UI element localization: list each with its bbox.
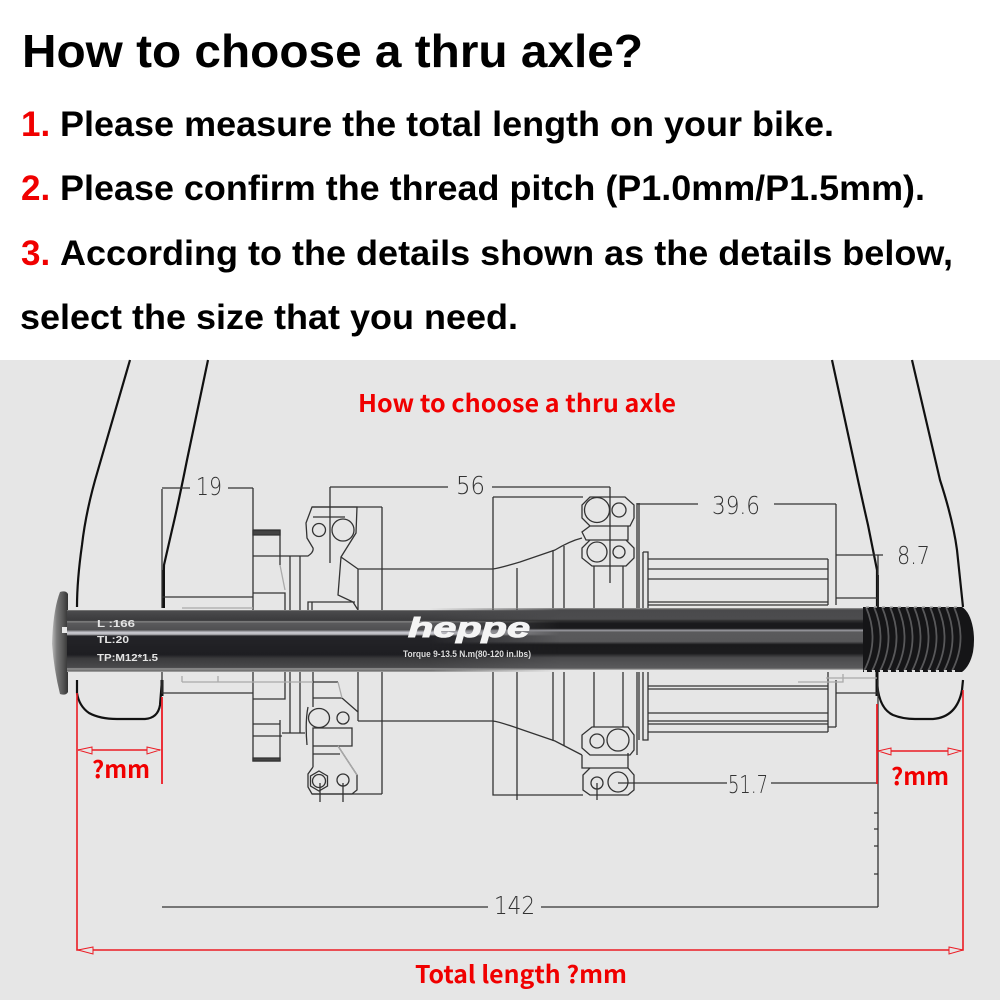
step 1: 1. (21, 105, 50, 144)
instructions (20, 105, 953, 337)
step 3 continued: select the size that you need. (20, 298, 518, 337)
thru axle (52, 591, 974, 695)
right lug lower (582, 727, 634, 795)
left fork dropout (77, 360, 208, 719)
left ?mm: ?mm (92, 750, 150, 785)
red labels (92, 750, 949, 990)
right lug upper (582, 497, 634, 566)
faded construction lines (182, 565, 877, 775)
dimension 39.6: 39.6 (712, 491, 760, 520)
drawing panel background (0, 360, 1000, 1000)
dimension numbers (196, 471, 930, 920)
hub shell (382, 497, 583, 795)
thick fork ends (162, 570, 878, 696)
dimension 8.7: 8.7 (897, 541, 930, 570)
axle markings (97, 612, 531, 664)
right spacing line (876, 704, 878, 784)
dimension 19: 19 (196, 472, 222, 501)
drawing heading: How to choose a thru axle (358, 384, 676, 419)
step 2: Please confirm the thread pitch (P1.0mm/P1.5mm). (60, 169, 925, 208)
length mark: L :166 (97, 618, 135, 630)
fork outlines (77, 360, 963, 719)
left lug lower (306, 670, 493, 794)
dimension 56: 56 (456, 471, 485, 500)
step 2: 2. (21, 169, 50, 208)
red measurement lines (77, 690, 963, 954)
step 3: 3. (21, 234, 50, 273)
dimension leader lines (162, 487, 883, 907)
axle threads (863, 607, 974, 672)
thread length mark: TL:20 (97, 634, 129, 646)
left spacing line (161, 697, 163, 784)
left flange (162, 488, 300, 610)
brand logo: heppe (408, 612, 530, 643)
step 1: Please measure the total length on your bike. (60, 105, 834, 144)
thread pitch mark: TP:M12*1.5 (97, 652, 158, 664)
title: How to choose a thru axle? (22, 25, 643, 77)
axle shaft (67, 608, 867, 672)
total length: Total length ?mm (415, 955, 627, 990)
total length line (77, 690, 963, 950)
axle head (52, 591, 68, 695)
cassette (637, 503, 836, 755)
dimension 142: 142 (494, 891, 535, 920)
right ?mm: ?mm (891, 757, 949, 792)
technical hub drawing (162, 487, 883, 907)
step 3: According to the details shown as the details below, (60, 234, 953, 273)
left lug upper (280, 507, 493, 610)
right fork dropout (832, 360, 963, 719)
dimension 51.7: 51.7 (728, 770, 768, 799)
torque spec: Torque 9-13.5 N.m(80-120 in.lbs) (403, 649, 531, 660)
arrowheads (78, 747, 963, 954)
